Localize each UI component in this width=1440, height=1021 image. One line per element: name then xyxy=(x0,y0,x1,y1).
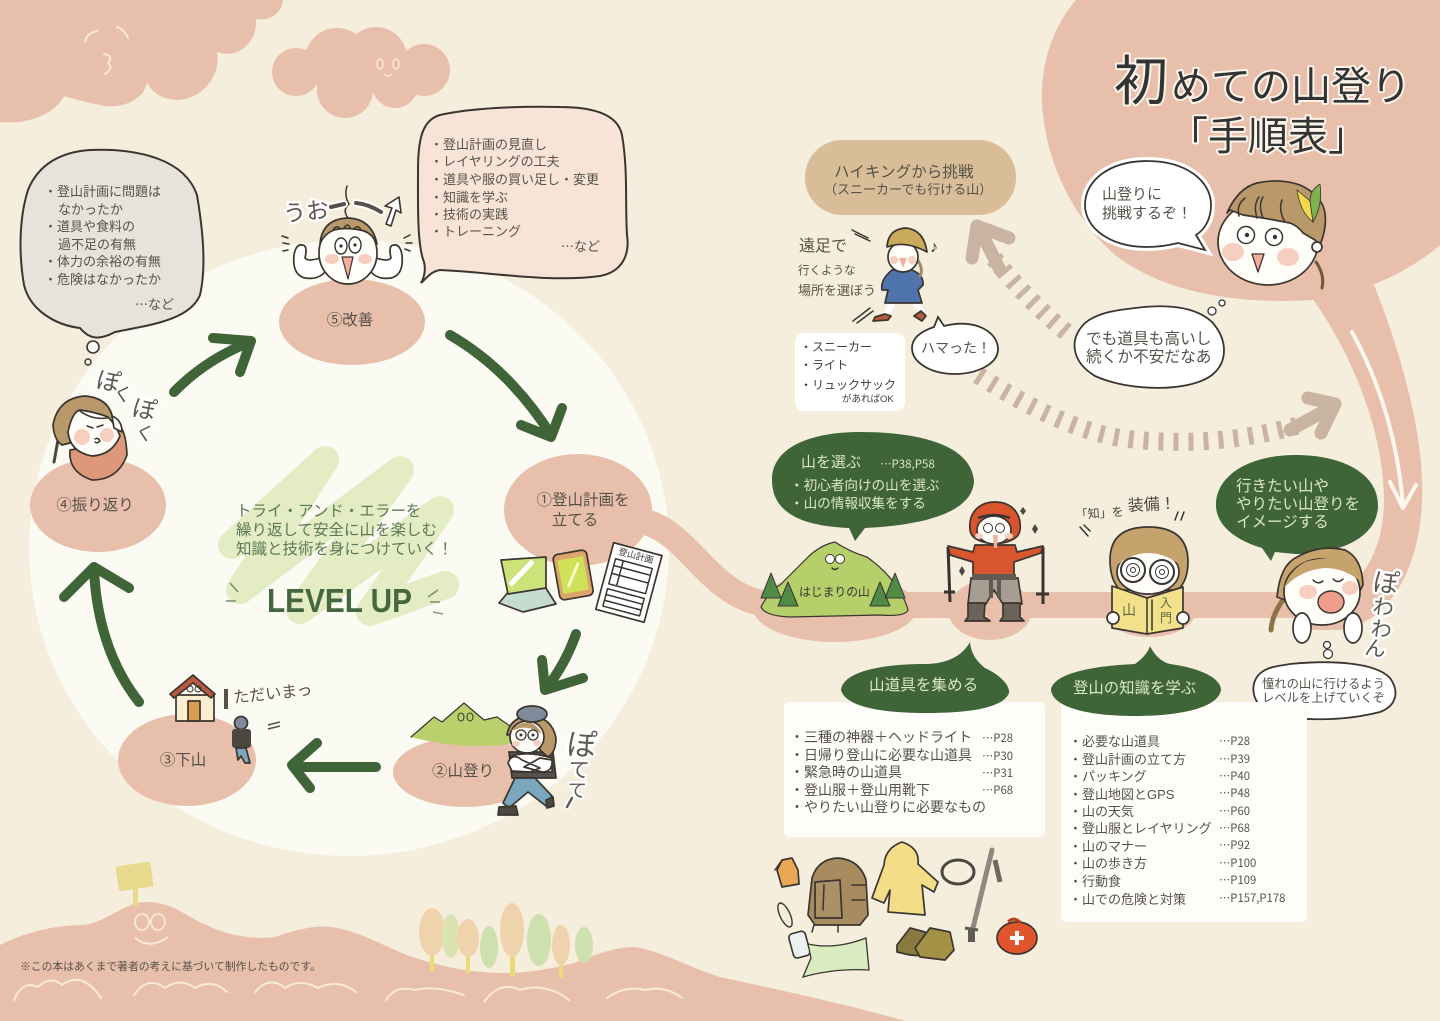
speech bubble: hooked xyxy=(912,317,998,374)
scalloped wave lines xyxy=(14,980,682,1002)
icon: rope coil xyxy=(942,860,974,884)
sound text: pokupoku: く xyxy=(133,422,157,447)
character: girl reading a book: 山 xyxy=(1122,602,1136,618)
step 1 blob: ①登山計画を xyxy=(536,491,630,509)
white panel: knowledge list: …P68 xyxy=(1219,820,1250,836)
title: めての山登り xyxy=(1171,65,1411,109)
bottom hills with face, sign and note xyxy=(0,862,905,1021)
white panel: knowledge list: ・山の歩き方 xyxy=(1069,856,1147,871)
sound text: pokupoku xyxy=(94,366,159,447)
step 2 blob: ②山登り xyxy=(432,762,494,780)
green bubble: choose a mountain xyxy=(772,432,974,541)
icon: map xyxy=(803,938,869,977)
handwritten text: outing xyxy=(798,237,876,298)
pale trees xyxy=(419,903,593,978)
step 1 blob: 立てる xyxy=(552,511,598,529)
white card: outing gear xyxy=(795,333,905,411)
white panel: gear list: …P31 xyxy=(982,765,1013,781)
white panel: knowledge list: ・山の天気 xyxy=(1069,804,1134,819)
icon: laptop xyxy=(499,557,556,612)
handwritten text: outing: 行くような xyxy=(798,264,856,277)
speech bubble: improvement list: ・知識を学ぶ xyxy=(430,190,508,205)
icon: backpack xyxy=(808,858,868,932)
thought bubble: reflection list: 過不足の有無 xyxy=(58,237,136,252)
green bubble: collect gear xyxy=(841,642,1009,713)
sound text: pokupoku: く xyxy=(111,383,135,408)
green bubble: learn knowledge: 登山の知識を学ぶ xyxy=(1073,679,1196,697)
icon: compass xyxy=(775,901,811,959)
thought bubble: gear is expensive: 続くか不安だなあ xyxy=(1086,348,1212,366)
music note: ♪ xyxy=(930,239,938,256)
character: climber in red jacket xyxy=(944,502,1049,621)
thought bubble: reflection list: なかったか xyxy=(58,202,123,217)
white panel: knowledge list: ・登山服とレイヤリング xyxy=(1069,821,1212,836)
pill: start with hiking xyxy=(805,140,1016,215)
step 5 blob: ⑤改善 xyxy=(327,311,373,329)
icon: trekking pole xyxy=(965,850,1000,942)
white panel: gear list: ・やりたい山登りに必要なもの xyxy=(790,799,986,815)
white card: outing gear: ・ライト xyxy=(800,358,848,372)
speech bubble: I will try climbing: 挑戦するぞ！ xyxy=(1102,205,1192,222)
white panel: knowledge list: ・山での危険と対策 xyxy=(1069,892,1186,907)
white panel: gear list: ・三種の神器＋ヘッドライト xyxy=(790,729,972,745)
speech bubble: improvement list: ・登山計画の見直し xyxy=(430,137,547,152)
white panel: gear list: ・緊急時の山道具 xyxy=(790,764,902,780)
white panel: knowledge list: ・パッキング xyxy=(1069,769,1147,784)
white circle panel behind the cycle xyxy=(29,240,669,856)
step 3 blob: ③下山 xyxy=(160,751,206,769)
speech bubble: improvement list: ・レイヤリングの工夫 xyxy=(430,154,560,169)
level up message: 繰り返して安全に山を楽しむ xyxy=(236,521,437,539)
white panel: gear list: …P28 xyxy=(982,730,1013,746)
icon: hiking boots xyxy=(897,928,954,960)
cloud: small with face xyxy=(272,27,450,118)
step 2 blob xyxy=(393,737,537,807)
handwritten text: equip knowledge: 装備！ xyxy=(1127,495,1176,515)
arrow: step 1 to step 2 xyxy=(542,634,583,690)
handwritten text: equip knowledge: 「知」を xyxy=(1075,505,1124,522)
thought bubble: gear is expensive: でも道具も高いし xyxy=(1086,330,1212,348)
sound text: pokupoku: ぽ xyxy=(130,394,159,426)
white panel: gear list: ・登山服＋登山用靴下 xyxy=(790,782,930,798)
speech bubble: improvement list: …など xyxy=(561,236,600,255)
sound text: potete xyxy=(565,728,598,807)
handwritten text: equip knowledge xyxy=(1075,495,1184,536)
speech bubble: improvement list: ・道具や服の買い足し・変更 xyxy=(430,172,599,187)
white panel: knowledge list: …P157,P178 xyxy=(1219,890,1285,906)
speech bubble: I will try climbing xyxy=(1085,161,1211,250)
handwritten text: outing: 遠足で xyxy=(799,237,847,255)
speech bubble: hooked: ハマった！ xyxy=(921,340,991,356)
character: thinking girl xyxy=(53,396,127,480)
sound text: powawan: ぽ xyxy=(1371,566,1401,600)
speech bubble: improvement list: ・技術の実践 xyxy=(430,207,508,222)
thought bubble: reflection list: ・危険はなかったか xyxy=(44,272,161,287)
sound text: potete: ぽ xyxy=(565,728,598,764)
large pink hill at top right xyxy=(1042,0,1440,301)
white panel: knowledge list: ・登山地図とGPS xyxy=(1069,787,1175,802)
character: walking hiker with beret xyxy=(498,706,556,815)
white panel: knowledge list: …P28 xyxy=(1219,733,1250,749)
icon: smartphone xyxy=(552,549,594,601)
sound text: potete: て xyxy=(568,758,590,783)
level up scribble xyxy=(232,460,445,612)
white panel: gear list: …P30 xyxy=(982,748,1013,764)
thought bubble: leveling up xyxy=(1253,642,1395,719)
thought bubble: gear is expensive xyxy=(1075,300,1225,388)
white panel: knowledge list: …P39 xyxy=(1219,751,1250,767)
step 5 blob xyxy=(279,279,425,365)
white panel: knowledge list: ・登山計画の立て方 xyxy=(1069,752,1186,767)
step 2 green mountain xyxy=(411,703,512,746)
green bubble: choose a mountain: ・初心者向けの山を選ぶ xyxy=(790,478,940,493)
thought bubble: reflection list: …など xyxy=(135,294,174,313)
white panel: knowledge list: …P60 xyxy=(1219,803,1250,819)
title: 「手順表」 xyxy=(1168,115,1368,159)
dashed arrow across to imagining xyxy=(978,375,1335,442)
note text: ※この本はあくまで著者の考えに基づいて制作したものです。 xyxy=(20,959,321,973)
thought bubble: reflection list: ・体力の余裕の有無 xyxy=(44,254,161,269)
character: girl reading a book: 門 xyxy=(1160,611,1172,625)
pink path ribbon linking step 1 to the right-hand route xyxy=(630,285,1422,642)
sound text: potete: て xyxy=(567,780,587,803)
step 4 blob xyxy=(30,458,166,552)
pill: start with hiking: ハイキングから挑戦 xyxy=(834,163,974,181)
character: girl reading a book xyxy=(1107,527,1189,634)
character: cheering with raised arms: うお xyxy=(282,196,330,227)
character: girl on an outing xyxy=(852,228,927,323)
white panel: knowledge list xyxy=(1061,702,1307,922)
character: small hiker returning xyxy=(232,716,251,763)
green bubble: choose a mountain: ・山の情報収集をする xyxy=(790,496,926,511)
white panel: knowledge list: …P40 xyxy=(1219,768,1250,784)
white panel: knowledge list: …P48 xyxy=(1219,785,1250,801)
green bubble: choose a mountain: …P38,P58 xyxy=(880,456,935,472)
green bubble: imagine your goal xyxy=(1216,455,1378,561)
character: dreaming girl xyxy=(1271,548,1363,643)
character: cheering with raised arms xyxy=(282,186,412,284)
speech bubble: improvement list: ・トレーニング xyxy=(430,224,521,239)
sound text: powawan: わ xyxy=(1371,595,1395,621)
cloud: top-left with face xyxy=(0,0,283,123)
white panel: knowledge list: …P100 xyxy=(1219,855,1256,871)
white panel: knowledge list: ・山のマナー xyxy=(1069,839,1147,854)
arrow: step 3 to step 4 xyxy=(64,567,139,702)
green bubble: imagine your goal: イメージする xyxy=(1236,513,1329,531)
white panel: knowledge list: …P92 xyxy=(1219,837,1250,853)
step 4 blob: ④振り返り xyxy=(56,496,134,514)
sound text: powawan: ん xyxy=(1363,636,1387,662)
level up message: LEVEL UP xyxy=(267,582,412,619)
white panel: knowledge list: ・行動食 xyxy=(1069,874,1121,889)
green bubble: choose a mountain: 山を選ぶ xyxy=(801,454,861,471)
white panel: gear list: ・日帰り登山に必要な山道具 xyxy=(790,747,972,763)
white panel: gear list xyxy=(784,702,1045,837)
handwritten text: outing: 場所を選ぼう xyxy=(798,283,876,298)
sound text: pokupoku: ぽ xyxy=(94,366,123,398)
thought bubble: leveling up: 憧れの山に行けるよう xyxy=(1262,677,1385,691)
green bubble: collect gear: 山道具を集める xyxy=(869,676,978,694)
green bubble: imagine your goal: 行きたい山や xyxy=(1236,477,1329,495)
illustration: starting mountain xyxy=(761,542,908,617)
pill: start with hiking: （スニーカーでも行ける山） xyxy=(824,182,992,197)
illustration: starting mountain: はじまりの山 xyxy=(799,585,870,599)
level up message xyxy=(226,502,453,619)
level up message: トライ・アンド・エラーを xyxy=(236,502,421,520)
green bubble: imagine your goal: やりたい山登りを xyxy=(1236,495,1360,513)
icon: climbing plan paper xyxy=(596,543,662,622)
icon: house xyxy=(170,675,215,721)
thought bubble: reflection list: ・道具や食料の xyxy=(44,219,135,234)
level up message: 知識と技術を身につけていく！ xyxy=(236,540,453,558)
dashed arrow up to hiking xyxy=(972,226,1066,332)
speech bubble: improvement list xyxy=(418,107,628,283)
green bubble: learn knowledge xyxy=(1051,646,1221,716)
title xyxy=(1114,52,1411,159)
icon: orange bottle xyxy=(775,858,799,887)
handwritten text: tadaima: ただいまっ xyxy=(233,681,313,707)
thought bubble: reflection list xyxy=(21,150,203,365)
white card: outing gear: があればOK xyxy=(842,393,894,405)
sound text: powawan: わ xyxy=(1369,617,1393,643)
character: beginner girl with leaf mark xyxy=(1218,181,1325,288)
arrow: step 4 to step 5 xyxy=(174,338,251,392)
step 1 blob xyxy=(504,454,652,566)
thought bubble: reflection list: ・登山計画に問題は xyxy=(44,184,161,199)
arrow: step 5 to step 1 xyxy=(450,335,562,437)
character: girl reading a book: 入 xyxy=(1160,596,1172,610)
icon: climbing plan paper: 登山計画 xyxy=(617,545,655,565)
white card: outing gear: ・スニーカー xyxy=(800,340,872,354)
white panel: knowledge list: …P109 xyxy=(1219,872,1256,888)
step 3 blob xyxy=(118,714,256,806)
icon: yellow raincoat xyxy=(872,842,938,915)
thought bubble: leveling up: レベルを上げていくぞ xyxy=(1262,691,1385,705)
white panel: knowledge list: ・必要な山道具 xyxy=(1069,734,1160,749)
white panel: gear list: …P68 xyxy=(982,782,1013,798)
arrow: step 2 to step 3 xyxy=(292,743,376,788)
handwritten text: tadaima xyxy=(224,681,313,729)
white card: outing gear: ・リュックサック xyxy=(800,378,896,392)
sound text: powawan xyxy=(1363,566,1401,662)
title: 初 xyxy=(1114,52,1168,112)
icon: first aid pouch xyxy=(997,919,1037,954)
speech bubble: I will try climbing: 山登りに xyxy=(1102,186,1162,203)
